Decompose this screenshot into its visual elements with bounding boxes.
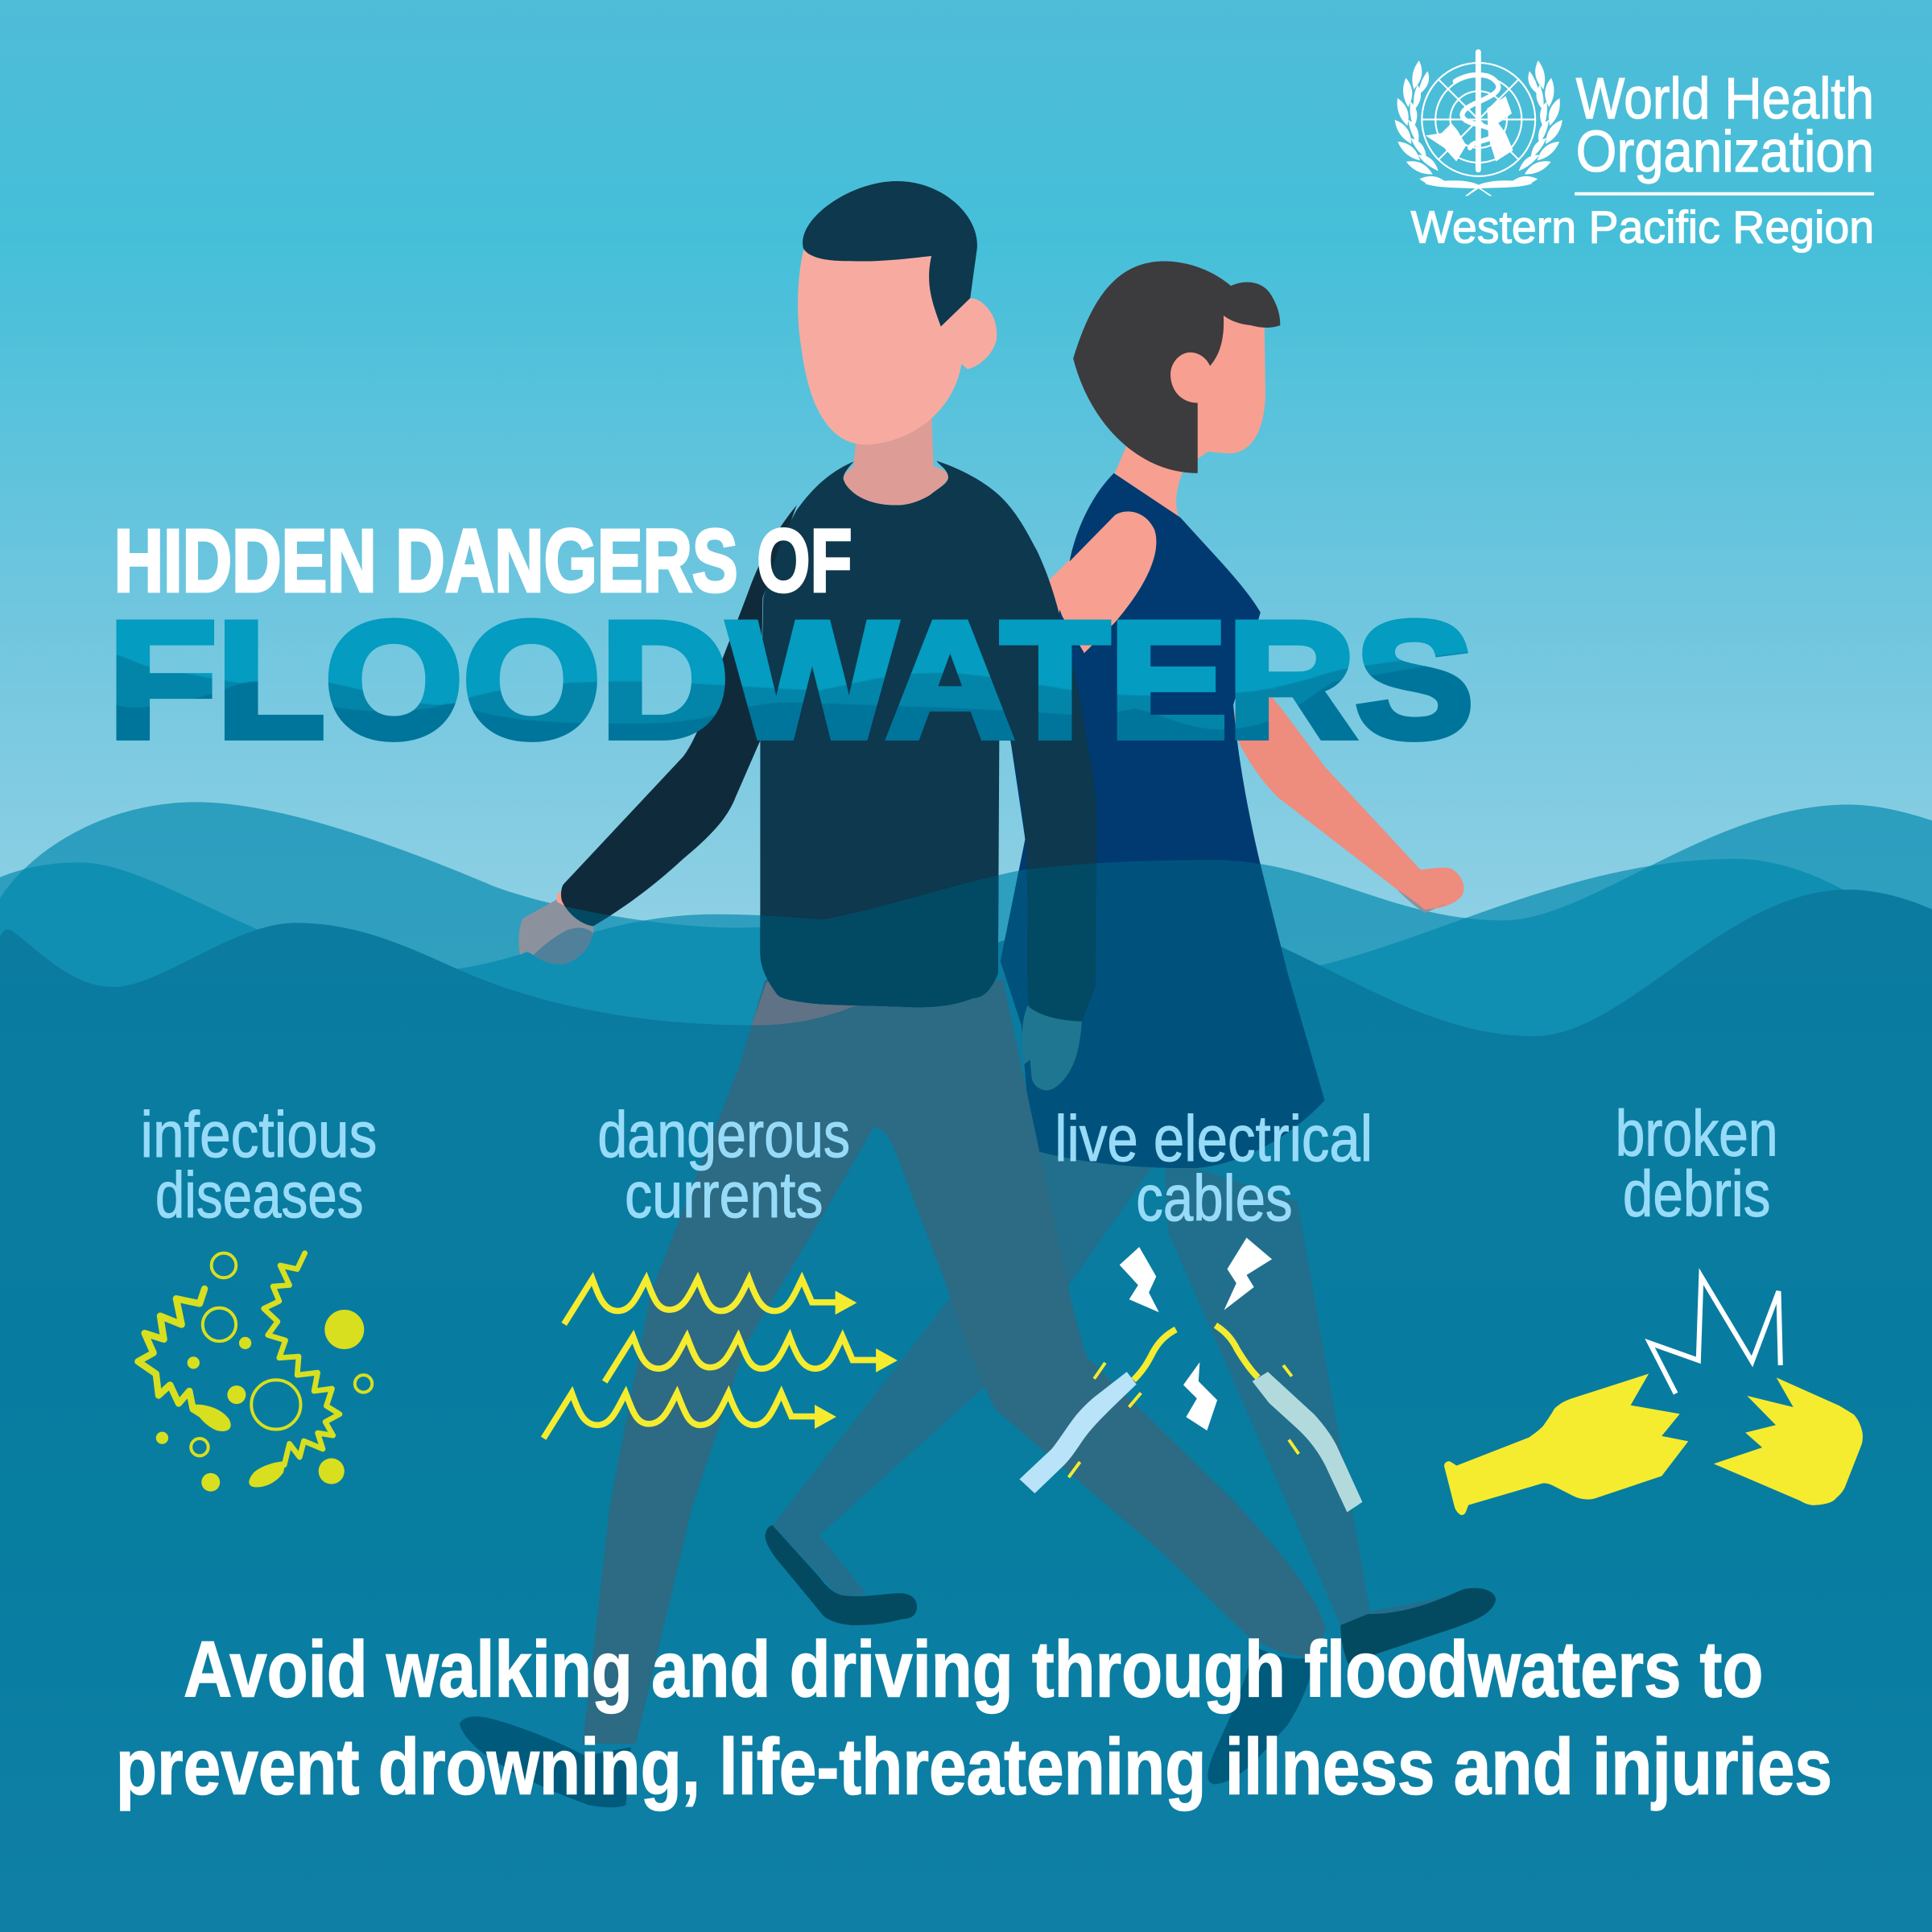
left wreath bbox=[1394, 60, 1449, 192]
woman's front leg bbox=[773, 1146, 1154, 1602]
man's shirt bbox=[760, 460, 1096, 1022]
hand under deeper water bbox=[534, 927, 592, 964]
label: broken debris bbox=[1616, 1098, 1778, 1231]
man's front foot bbox=[1208, 1646, 1314, 1784]
label: infectious diseases bbox=[140, 1099, 377, 1232]
continents bbox=[1426, 123, 1466, 162]
panel: live electrical cables bbox=[1019, 1103, 1373, 1513]
right cable sheath bbox=[1253, 1372, 1362, 1513]
label: dangerous currents: dangerous bbox=[597, 1099, 850, 1171]
current arrow 2 bbox=[605, 1336, 898, 1382]
call to action bbox=[116, 1625, 1832, 1811]
wreath ribbon bbox=[1424, 180, 1533, 196]
man's ear bbox=[949, 298, 997, 369]
skin at man's wrist bbox=[557, 891, 564, 906]
illustration: man bbox=[196, 72, 1844, 1808]
logo rule bbox=[1575, 192, 1874, 196]
label: dangerous currents: currents bbox=[625, 1159, 823, 1232]
logo text: Organization: Organization bbox=[1576, 120, 1874, 184]
label: infectious diseases: infectious bbox=[140, 1099, 377, 1171]
staff bbox=[1476, 49, 1481, 172]
icon: currents bbox=[543, 1279, 898, 1439]
man's back foot bbox=[460, 1716, 631, 1807]
woman's ear bbox=[1170, 353, 1222, 403]
front flood water bbox=[0, 890, 1932, 1932]
woman's shoulder bbox=[1050, 511, 1156, 653]
spark dashes bbox=[1069, 1363, 1298, 1477]
current arrow 3 bbox=[543, 1393, 836, 1439]
man's hanging hand bbox=[1022, 1005, 1082, 1091]
label: infectious diseases: diseases bbox=[155, 1159, 364, 1232]
globe rings bbox=[1422, 63, 1535, 176]
bottle neck piece bbox=[1444, 1373, 1688, 1515]
panel: dangerous currents bbox=[543, 1099, 898, 1439]
woman's dress under water bbox=[1001, 860, 1325, 1168]
icon: broken cables bbox=[1019, 1238, 1362, 1513]
heading: hidden dangers of: HIDDEN DANGERS OF bbox=[114, 512, 852, 611]
man's dark sleeve bbox=[561, 506, 797, 926]
label: broken debris: broken bbox=[1616, 1098, 1778, 1170]
sparks bbox=[1120, 1238, 1272, 1430]
woman's neck bbox=[1114, 444, 1220, 520]
illustration: woman bbox=[765, 261, 1496, 1663]
logo text: World Health: World Health bbox=[1576, 67, 1874, 131]
panel: infectious diseases bbox=[138, 1099, 377, 1492]
label: live electrical cables: live electrical bbox=[1055, 1103, 1373, 1175]
back flood waves bbox=[0, 802, 1932, 1932]
label: dangerous currents bbox=[597, 1099, 850, 1232]
woman's front shoe bbox=[766, 1525, 917, 1625]
man's neck bbox=[844, 413, 948, 506]
label: live electrical cables bbox=[1055, 1103, 1373, 1235]
emblem bbox=[1394, 49, 1563, 196]
label: broken debris: debris bbox=[1623, 1158, 1770, 1231]
logo text: Western Pacific Region: Western Pacific Region bbox=[1411, 203, 1874, 254]
logo: World Health Organization bbox=[1394, 49, 1874, 254]
icon: broken bottle bbox=[1444, 1277, 1863, 1515]
woman's back arm bbox=[1047, 511, 1156, 690]
bottle base piece bbox=[1714, 1377, 1863, 1505]
heading: floodwaters: FLOODWATERS bbox=[109, 588, 1474, 772]
woman's hand under water bbox=[1397, 890, 1447, 913]
right wreath bbox=[1508, 60, 1563, 192]
snake bbox=[1455, 75, 1498, 148]
man's trousers front leg bbox=[789, 980, 1326, 1657]
man's shirt under water bbox=[565, 863, 1096, 1022]
panel: broken debris bbox=[1444, 1098, 1863, 1515]
man's trailing hand bbox=[518, 899, 594, 964]
label: live electrical cables: cables bbox=[1136, 1162, 1293, 1235]
man's hair bbox=[803, 181, 977, 327]
woman's back leg bbox=[1164, 1158, 1463, 1663]
icon: germs bbox=[138, 1253, 372, 1492]
title bbox=[109, 512, 1474, 772]
exposed wires bbox=[1133, 1325, 1258, 1380]
woman's front arm bbox=[1232, 666, 1463, 910]
current arrow 1 bbox=[564, 1279, 857, 1324]
break lines bbox=[1649, 1277, 1781, 1393]
man's trousers back leg bbox=[583, 980, 899, 1744]
man's face bbox=[798, 246, 970, 445]
trousers above water line bbox=[752, 982, 890, 1026]
woman's hair bbox=[1073, 261, 1280, 473]
left cable sheath bbox=[1019, 1372, 1137, 1493]
woman's face bbox=[1170, 295, 1265, 453]
woman's dress bbox=[1001, 473, 1324, 1168]
woman's back shoe bbox=[1340, 1588, 1496, 1663]
